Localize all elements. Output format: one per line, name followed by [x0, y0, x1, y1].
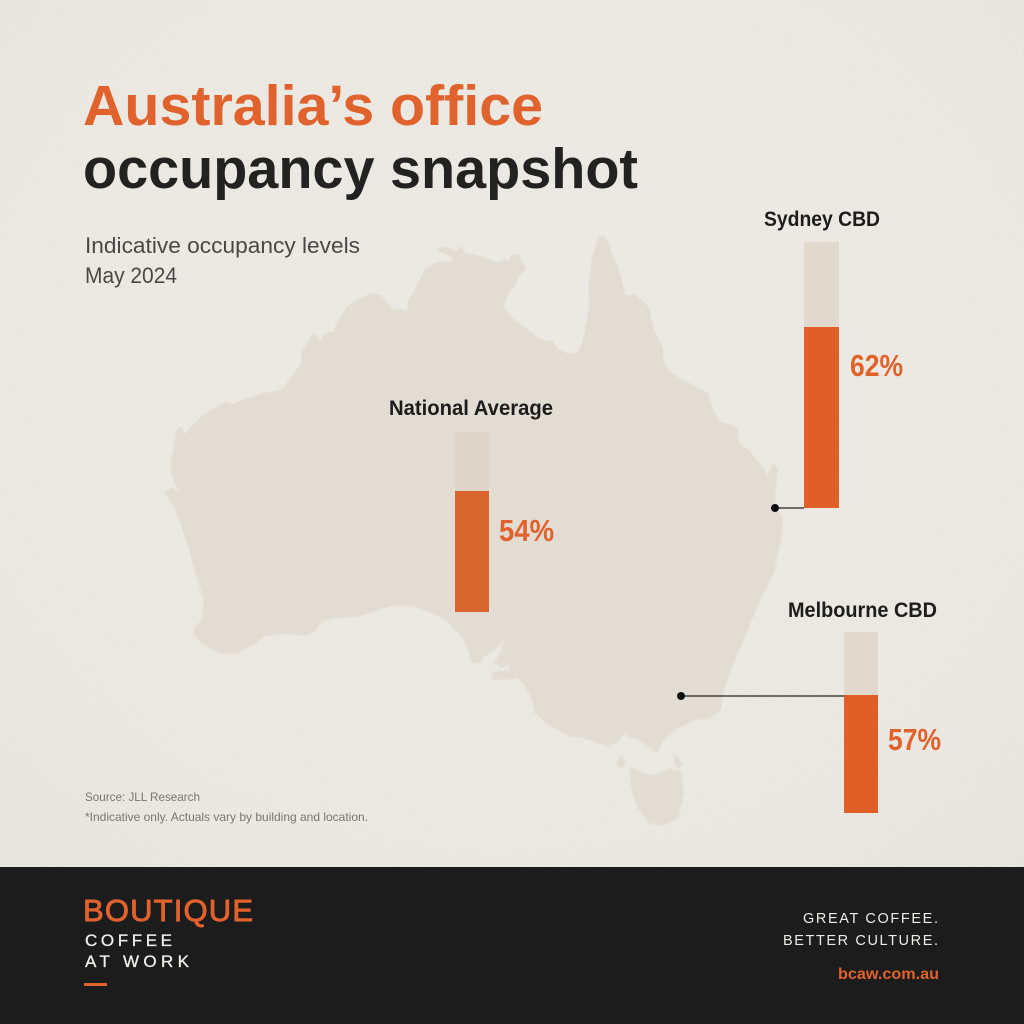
brand: Boutique: BOUTIQUE [83, 893, 253, 928]
footer band [0, 867, 1024, 1024]
leader line: Sydney [771, 504, 804, 512]
source note: *Indicative only. Actuals vary by building and location. [85, 810, 368, 824]
source note: Source: JLL Research [85, 790, 200, 804]
bar track [455, 432, 489, 612]
bar: Melbourne CBD [788, 599, 941, 813]
brand: Coffee at Work [85, 931, 190, 971]
bar fill [455, 491, 489, 612]
map: Flinders Island [673, 755, 683, 768]
source note [85, 790, 368, 824]
tagline: GREAT COFFEE. [803, 911, 938, 927]
subtitle [85, 233, 360, 288]
brand accent dash [84, 983, 107, 986]
map: Tasmania [630, 768, 683, 825]
leader line: Melbourne [677, 692, 844, 700]
map: mainland [165, 236, 782, 752]
title line 1: Australia’s office [83, 74, 543, 138]
value: 62% [850, 348, 903, 383]
website: bcaw.com.au [838, 966, 939, 983]
title line 2: occupancy snapshot [83, 137, 638, 201]
bar fill [844, 695, 878, 813]
bar: Sydney CBD [764, 208, 903, 508]
tagline: BETTER CULTURE. [783, 933, 938, 949]
label: National Average [389, 397, 553, 420]
brand: Coffee at Work: COFFEE [85, 931, 172, 950]
bar fill [804, 327, 839, 508]
map: King Island [618, 756, 624, 768]
label: Sydney CBD [764, 208, 880, 231]
value: 57% [888, 722, 941, 757]
brand: Coffee at Work: AT WORK [85, 952, 190, 971]
bar: National Average [389, 397, 554, 612]
subtitle: May 2024 [85, 263, 177, 288]
bar track [844, 632, 878, 813]
map: Australia silhouette [165, 236, 782, 825]
bar track [804, 242, 839, 508]
subtitle: Indicative occupancy levels [85, 233, 360, 258]
value: 54% [499, 513, 554, 548]
title [83, 74, 638, 201]
label: Melbourne CBD [788, 599, 937, 622]
tagline [783, 911, 938, 949]
